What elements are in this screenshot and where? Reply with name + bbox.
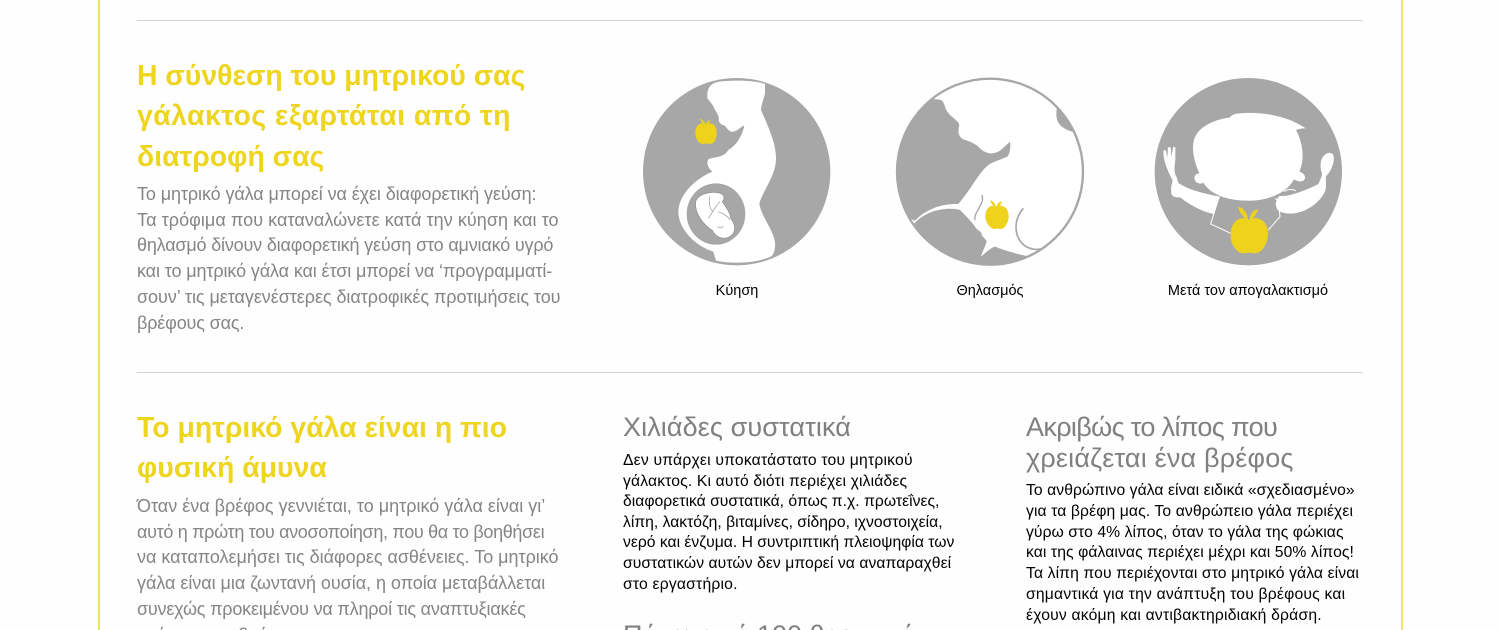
icon: after weaning [1154,78,1342,266]
icon: apple [1231,207,1268,253]
heading: most natural defence [137,412,507,484]
heading: milk composition depends on diet: Η σύνθεση του μητρικού σας [137,60,525,92]
caption: breastfeeding: Θηλασμός [956,283,1024,299]
text block: milk taste: βρέφους σας. [137,313,244,333]
text block: fat [1026,482,1359,624]
caption: pregnancy: Κύηση [716,283,758,299]
text block: milk taste: θηλασμό δίνουν διαφορετική γεύση στο αμνιακό υγρό [137,235,553,255]
text block: milk taste: Το μητρικό γάλα μπορεί να έχει διαφορετική γεύση: [137,184,536,204]
text block: fat: για τα βρέφη μας. Το ανθρώπειο γάλα περιέχει [1026,503,1353,520]
text block: natural defence: συνεχώς προκειμένου να πληροί τις αναπτυξιακές [137,599,526,619]
text block: fat: Τα λίπη που περιέχονται στο μητρικό γάλα είναι [1026,565,1359,582]
text block: natural defence: Όταν ένα βρέφος γεννιέται, το μητρικό γάλα είναι γι’ [137,496,545,516]
text block: natural defence: να καταπολεμήσει τις διάφορες ασθένειες. Το μητρικό [137,547,559,567]
caption: after weaning: Μετά τον απογαλακτισμό [1168,283,1328,299]
text block: ingredients: λίπη, λακτόζη, βιταμίνες, σίδηρο, ιχνοστοιχεία, [623,514,943,531]
text block: natural defence [136,496,559,630]
text block: ingredients: διαφορετικά συστατικά, όπως π.χ. πρωτεΐνες, [623,493,939,510]
heading: milk composition depends on diet: γάλακτος εξαρτάται από τη [137,100,511,132]
heading: most natural defence: φυσική άμυνα [137,452,327,484]
text block: milk taste: και το μητρικό γάλα και έτσι μπορεί να ‘προγραμματί- [137,261,552,281]
heading: exactly the fat a baby needs [1026,412,1294,473]
text block: natural defence: αυτό η πρώτη του ανοσοποίηση, που θα το βοηθήσει [137,522,544,542]
heading: milk composition depends on diet [137,60,525,173]
icon: pregnancy [643,78,830,266]
icon: apple [695,119,717,144]
text block: natural defence: γάλα είναι μια ζωντανή ουσία, η οποία μεταβάλλεται [137,573,545,593]
heading: exactly the fat a baby needs: χρειάζεται ένα βρέφος [1026,443,1294,473]
heading: thousands of ingredients: Χιλιάδες συστατικά [623,412,851,442]
text block: ingredients [623,452,954,593]
text block: fat: έχουν ακόμη και αντιβακτηριδιακή δράση. [1026,607,1322,624]
text block: milk taste: σουν’ τις μεταγενέστερες διατροφικές προτιμήσεις του [137,287,560,307]
text block: ingredients: συστατικών αυτών δεν μπορεί να αναπαραχθεί [623,555,951,572]
icon: apple [985,200,1009,229]
heading: most natural defence: Το μητρικό γάλα είναι η πιο [137,412,507,444]
text block: fat: σημαντικά για την ανάπτυξη του βρέφους και [1026,586,1345,603]
text block: ingredients: γάλακτος. Κι αυτό διότι περιέχει χιλιάδες [623,473,907,490]
text block: fat: Το ανθρώπινο γάλα είναι ειδικά «σχεδιασμένο» [1026,482,1355,499]
text block: ingredients: στο εργαστήριο. [623,576,738,593]
text block: ingredients: νερό και ένζυμα. Η συντριπτική πλειοψηφία των [623,534,954,551]
text block: fat: και της φάλαινας περιέχει μέχρι και 50% λίπος! [1026,544,1354,561]
text block: milk taste [137,184,560,333]
text block: milk taste: Τα τρόφιμα που καταναλώνετε κατά την κύηση και το [137,210,559,230]
heading: exactly the fat a baby needs: Ακριβώς το λίπος που [1026,412,1277,442]
heading: milk composition depends on diet: διατροφή σας [137,141,324,173]
icon: breastfeeding [896,78,1084,266]
text block: fat: γύρω στο 4% λίπος, όταν το γάλα της φώκιας [1026,524,1344,541]
text block: ingredients: Δεν υπάρχει υποκατάστατο του μητρικού [623,452,913,469]
